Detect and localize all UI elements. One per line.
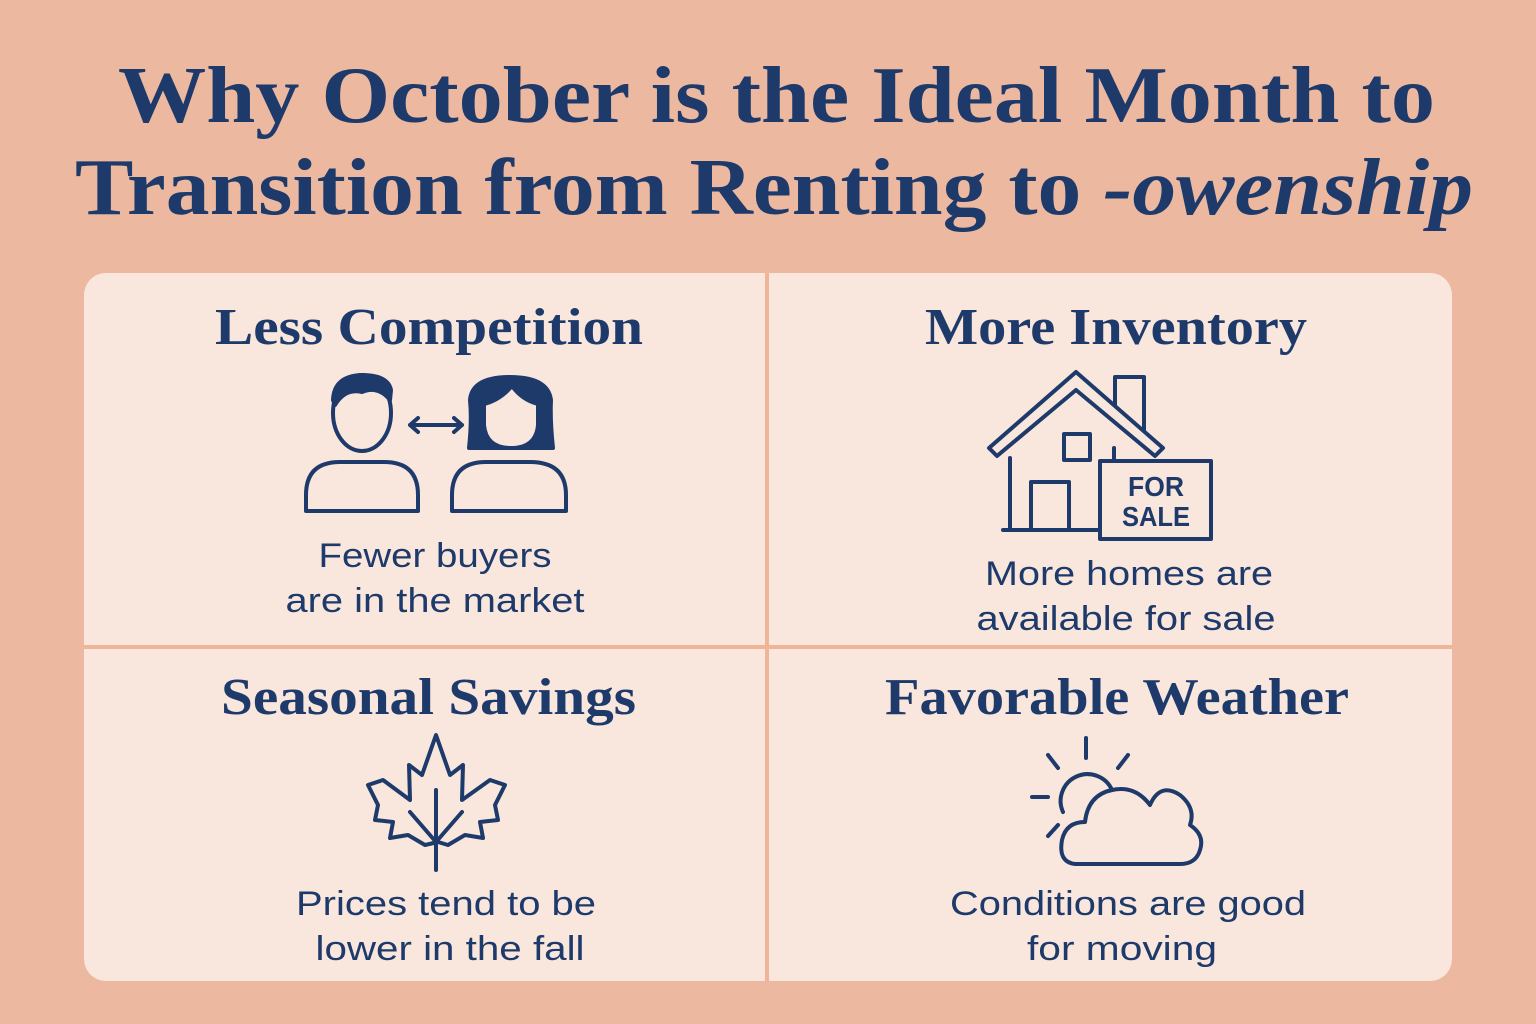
panel: more inventory [925,299,1307,638]
icon: house for sale [989,372,1211,539]
title: Transition from Renting to -owenship [75,144,1473,232]
panel: favorable weather: for moving [1027,930,1217,968]
panel: seasonal savings [221,669,636,968]
text: more homes: More homes are [985,555,1273,593]
panel: less competition [215,299,643,620]
icon: sun and cloud [1032,738,1201,864]
panel: less competition: are in the market [286,582,585,620]
text: conditions: Conditions are good [950,885,1306,923]
panel: more inventory: SALE [1122,501,1190,532]
icon: two buyers [306,375,566,511]
panel: more inventory: FOR [1128,471,1184,502]
title [75,52,1473,232]
heading: less competition: Less Competition [215,299,643,356]
heading: favorable weather: Favorable Weather [885,669,1349,726]
card background [84,273,1452,981]
text: fewer buyers: Fewer buyers [318,537,552,575]
panel: more inventory: available for sale [976,600,1276,638]
icon: maple leaf [368,735,505,870]
panel: favorable weather [885,669,1349,968]
text: prices: Prices tend to be [296,885,596,923]
title: Why October is the Ideal Month to [118,52,1435,140]
heading: seasonal savings: Seasonal Savings [221,669,636,726]
heading: more inventory: More Inventory [925,299,1307,356]
panel: seasonal savings: lower in the fall [316,930,584,968]
